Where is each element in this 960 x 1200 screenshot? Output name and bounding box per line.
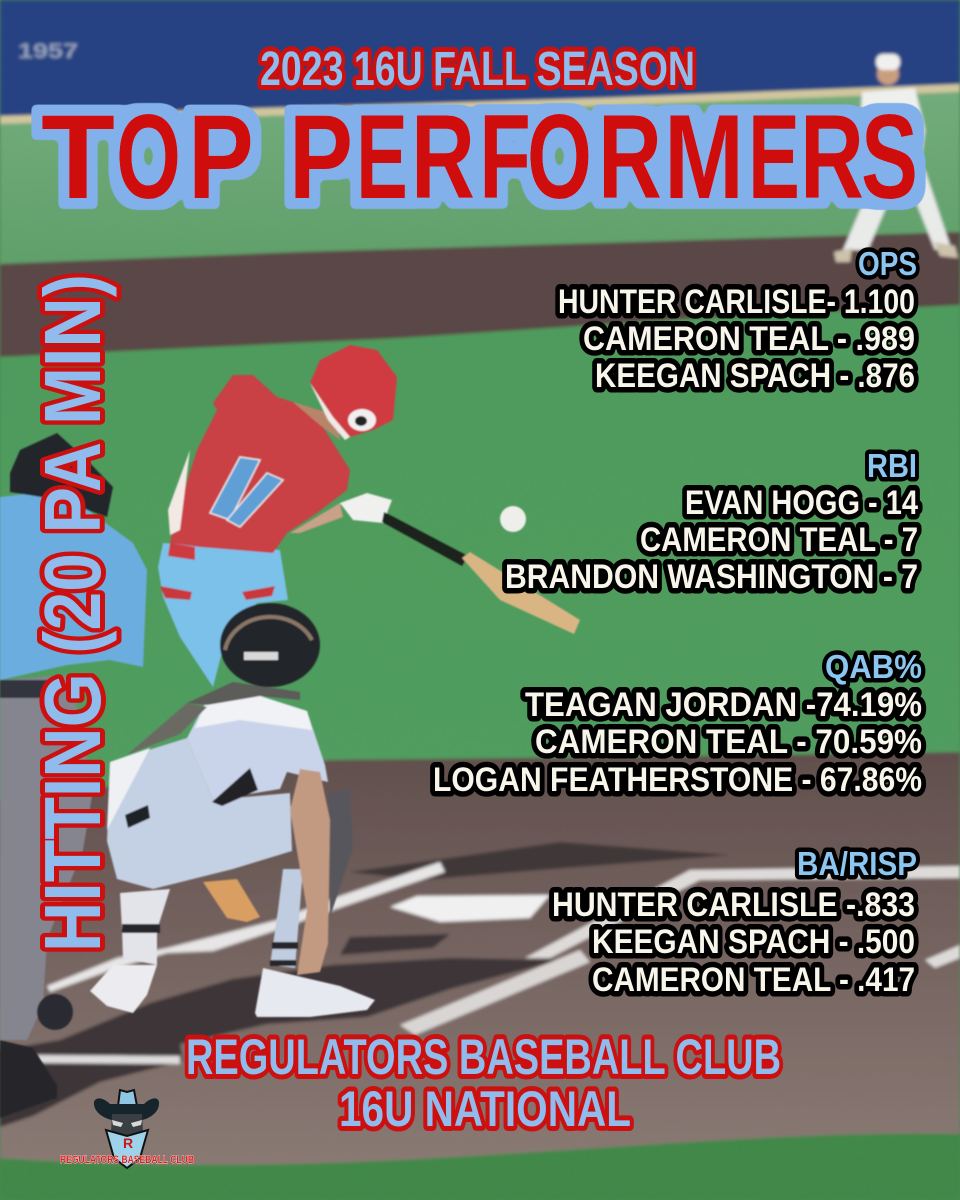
bottom grass: [0, 1133, 960, 1200]
BA/RISP leader 1: HUNTER CARLISLE -.833: [552, 886, 915, 924]
scoreboard number: 1957: [18, 40, 78, 63]
title: R: [598, 90, 662, 224]
footer line 2: 16U NATIONAL: [339, 1081, 631, 1137]
heading: BA/RISP: BA/RISP: [797, 845, 917, 882]
title: S: [861, 90, 918, 224]
stat block: QAB%: [433, 648, 922, 799]
jersey number 11: [210, 457, 260, 520]
QAB leader 2: CAMERON TEAL - 70.59%: [535, 723, 922, 761]
side heading: hitting: HITTING (20 PA MIN): [28, 274, 117, 952]
umpire: [0, 433, 147, 1118]
BA/RISP leader 2: KEEGAN SPACH - .500: [592, 923, 915, 961]
RBI leader 1: EVAN HOGG - 14: [685, 484, 918, 522]
subtitle: 2023 16U FALL SEASON: [260, 43, 695, 96]
bat: [382, 512, 468, 566]
catcher pants: [107, 738, 292, 889]
catcher shoes: [90, 965, 157, 1013]
heading: QAB%: QAB%: [825, 648, 922, 685]
title: R: [411, 90, 475, 224]
title: E: [356, 90, 408, 224]
stat block: RBI: [505, 447, 918, 596]
fielder in background: [834, 54, 958, 262]
catcher shirt and vest: [187, 696, 328, 800]
footer team name: [186, 1029, 781, 1137]
outfield grass: [0, 92, 960, 264]
title: O: [527, 90, 592, 224]
BA/RISP leader 3: CAMERON TEAL - .417: [592, 961, 915, 999]
OPS leader 3: KEEGAN SPACH - .876: [595, 357, 915, 395]
chalk lines: [47, 862, 445, 992]
RBI leader 2: CAMERON TEAL - 7: [640, 521, 918, 559]
title: P: [188, 90, 252, 224]
logo wordmark: REGULATORS BASEBALL CLUB: [60, 1154, 194, 1166]
outfield wall: [0, 0, 960, 116]
helmet: [310, 345, 397, 437]
title: P: [289, 90, 353, 224]
ball: [500, 506, 526, 532]
logo: regulators outlaw: [60, 1090, 194, 1168]
title: T: [41, 90, 115, 224]
shadows on dirt: [350, 842, 730, 880]
home plate dirt: [0, 752, 960, 1165]
catcher: [90, 603, 375, 1017]
arms and gloves: [290, 503, 343, 533]
OPS leader 2: CAMERON TEAL - .989: [583, 320, 915, 358]
RBI leader 3: BRANDON WASHINGTON - 7: [505, 558, 918, 596]
title: R: [800, 90, 864, 224]
heading: RBI: RBI: [867, 447, 917, 484]
batter: [158, 345, 580, 687]
jersey: [170, 375, 350, 553]
catcher legs: [120, 889, 170, 965]
title: F: [479, 90, 531, 224]
footer line 1: REGULATORS BASEBALL CLUB: [186, 1029, 781, 1085]
catcher helmet: [220, 603, 320, 687]
warning track: [0, 84, 960, 124]
title: E: [748, 90, 800, 224]
infield dirt band: [0, 232, 960, 357]
title: M: [664, 90, 744, 224]
pants: [158, 543, 288, 687]
stat block: OPS: [558, 245, 917, 395]
title: O: [116, 90, 181, 224]
QAB leader 1: TEAGAN JORDAN -74.19%: [525, 686, 922, 724]
stat block: BA/RISP: [552, 845, 917, 999]
heading: OPS: OPS: [858, 245, 917, 282]
logo: regulators outlaw: R: [123, 1135, 133, 1151]
catcher gear and forearm: [328, 789, 353, 917]
